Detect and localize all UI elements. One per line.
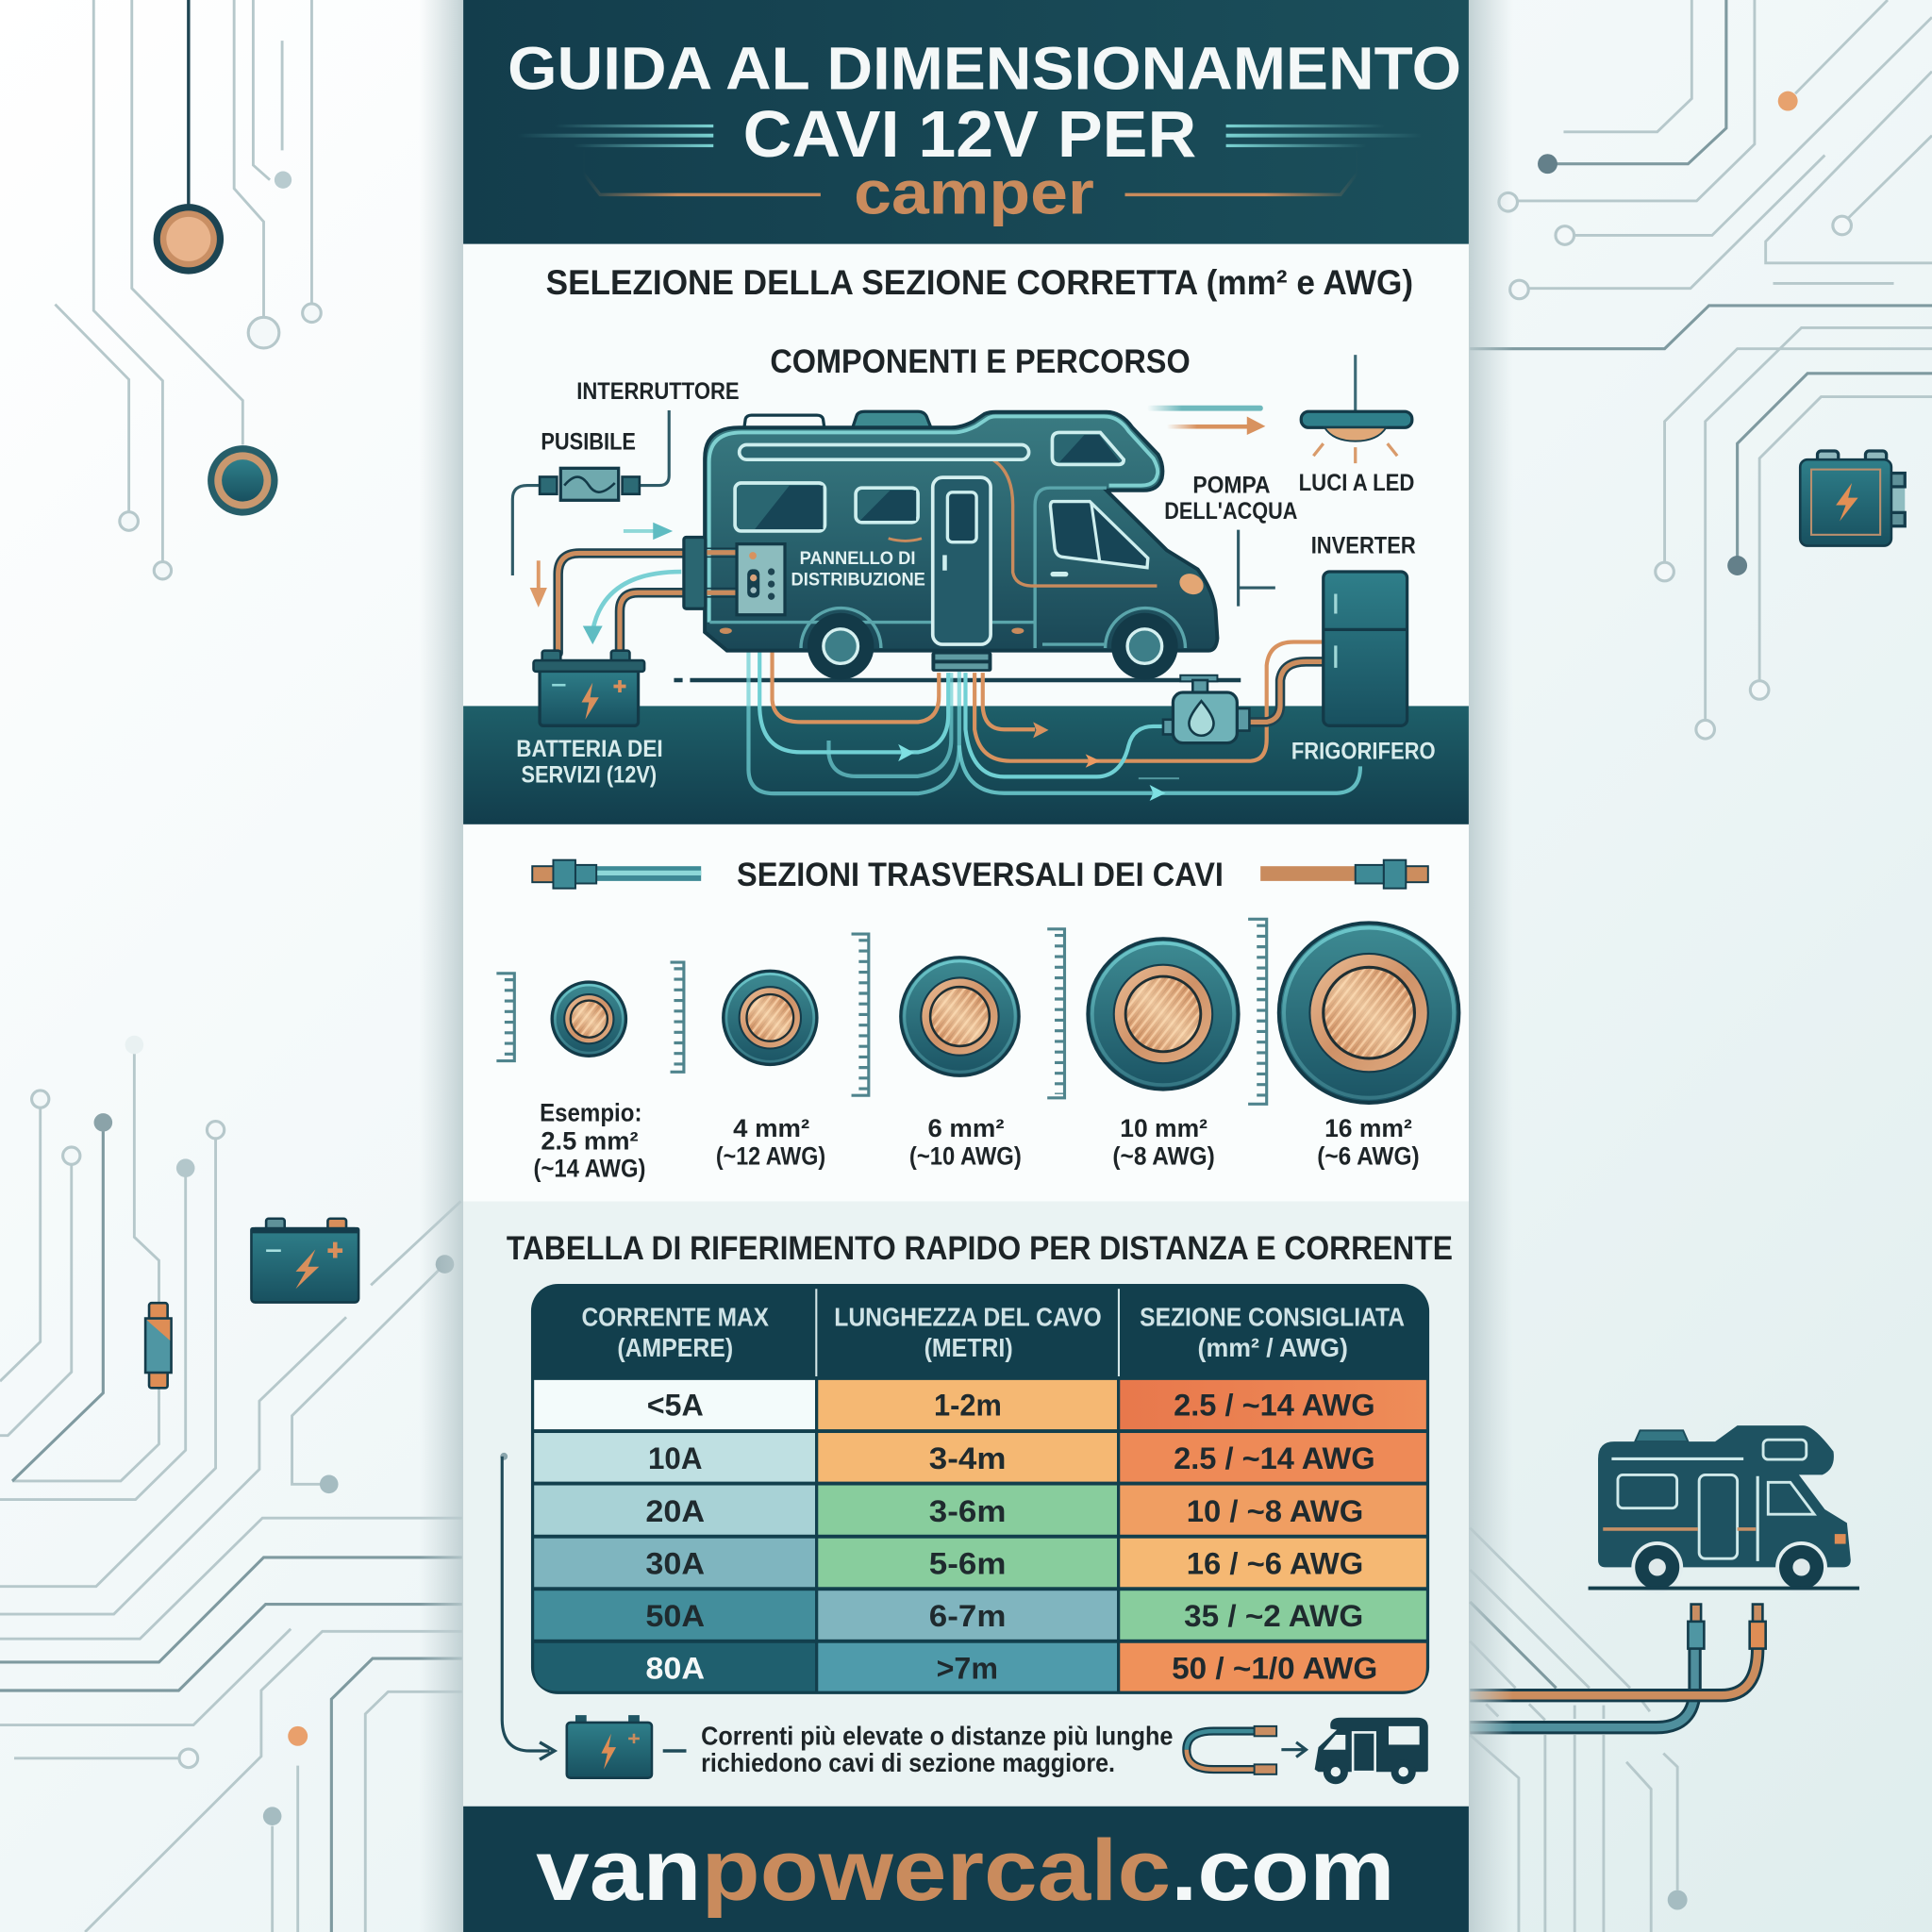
circuit traces: top right bbox=[1470, 0, 1932, 739]
row 80A: >7m bbox=[937, 1651, 998, 1686]
circuit traces: bottom right bbox=[1470, 1528, 1688, 1932]
label: inverter: INVERTER bbox=[1311, 533, 1416, 558]
label: water pump bbox=[1164, 473, 1297, 525]
icon: fuse bbox=[145, 1303, 172, 1388]
label: distribution panel bbox=[791, 548, 925, 590]
window middle bbox=[856, 488, 918, 523]
side connector block bbox=[684, 537, 706, 608]
row 80A: 80A bbox=[645, 1651, 705, 1686]
ground band bbox=[463, 706, 1469, 824]
website url: van powercalc .com bbox=[536, 1823, 1395, 1919]
distribution panel box bbox=[737, 544, 785, 615]
front wheel bbox=[1106, 608, 1185, 679]
underfloor connector bbox=[931, 652, 991, 672]
title ornaments bbox=[518, 125, 1422, 194]
table header bbox=[581, 1289, 1405, 1376]
table header: CORRENTE MAX bbox=[581, 1302, 770, 1331]
door bbox=[933, 477, 991, 644]
icon: battery left bbox=[250, 1219, 359, 1303]
row 30A bbox=[534, 1539, 1426, 1587]
battery cables bbox=[558, 548, 737, 653]
panel: reference table bbox=[500, 1230, 1453, 1784]
icon: fridge bbox=[1324, 572, 1407, 725]
orange line bbox=[811, 458, 1157, 586]
icon: water pump bbox=[1163, 675, 1249, 743]
title: camper bbox=[854, 158, 1094, 227]
row <5A: 1-2m bbox=[934, 1388, 1002, 1423]
icon: U cable bbox=[1187, 1726, 1276, 1774]
title: GUIDA AL DIMENSIONAMENTO bbox=[508, 35, 1461, 103]
row 30A: 30A bbox=[645, 1546, 705, 1581]
row 10A: 3-4m bbox=[929, 1441, 1006, 1475]
underfloor cables bbox=[748, 615, 1360, 801]
cable 4 mm2 bbox=[724, 971, 817, 1064]
row 20A bbox=[534, 1486, 1426, 1535]
note text: Correnti più elevate o distanze più lunghe bbox=[701, 1721, 1173, 1750]
footer bbox=[463, 1807, 1469, 1932]
panel shadows bbox=[419, 0, 1513, 1932]
panel: cable cross sections bbox=[496, 857, 1458, 1182]
table header: (METRI) bbox=[924, 1333, 1013, 1362]
road line bbox=[674, 678, 1241, 682]
rulers bbox=[496, 919, 1267, 1104]
table header: (AMPERE) bbox=[617, 1333, 733, 1362]
label: distribution panel: DISTRIBUZIONE bbox=[791, 569, 925, 590]
icon: battery top right bbox=[1800, 451, 1905, 546]
cable labels: (~6 AWG) bbox=[1317, 1141, 1420, 1170]
cable 10 mm2 bbox=[1088, 939, 1239, 1090]
section heading: table: TABELLA DI RIFERIMENTO RAPIDO PER DISTANZA E CORRENTE bbox=[507, 1230, 1453, 1267]
cable labels: 10 mm² bbox=[1120, 1114, 1208, 1142]
camper bbox=[705, 411, 1217, 679]
header bbox=[463, 0, 1469, 244]
row 20A: 20A bbox=[645, 1493, 705, 1528]
table header: LUNGHEZZA DEL CAVO bbox=[834, 1302, 1102, 1331]
note text: richiedono cavi di sezione maggiore. bbox=[701, 1748, 1115, 1777]
main panel bbox=[463, 244, 1469, 1807]
node: teal bbox=[208, 445, 278, 516]
cable 6 mm2 bbox=[901, 958, 1019, 1075]
icon: LED lamp bbox=[1301, 355, 1412, 463]
connector right bbox=[1260, 860, 1428, 889]
circuit traces: top left bbox=[55, 0, 321, 579]
row 50A: 50A bbox=[645, 1598, 705, 1633]
camper rim highlight bbox=[709, 416, 1158, 623]
row 80A: 50 / ~1/0 AWG bbox=[1172, 1651, 1377, 1686]
pump leader bbox=[1239, 530, 1275, 607]
cable labels: (~12 AWG) bbox=[716, 1141, 825, 1170]
note text bbox=[701, 1721, 1173, 1777]
label: battery: BATTERIA DEI bbox=[516, 737, 663, 762]
cable labels: (~10 AWG) bbox=[909, 1141, 1022, 1170]
circuit traces: bottom left bbox=[0, 1036, 462, 1932]
label: battery: SERVIZI (12V) bbox=[521, 762, 657, 788]
pump to fridge cables bbox=[1247, 661, 1324, 722]
table bbox=[531, 1284, 1429, 1694]
row <5A: 2.5 / ~14 AWG bbox=[1174, 1388, 1375, 1423]
label: water pump: POMPA bbox=[1192, 473, 1271, 498]
cab window bbox=[1050, 502, 1148, 568]
row 50A: 6-7m bbox=[929, 1598, 1006, 1633]
row 10A bbox=[534, 1433, 1426, 1482]
row 10A: 10A bbox=[648, 1441, 702, 1475]
arrows near battery bbox=[530, 523, 681, 644]
section heading: selection: SELEZIONE DELLA SEZIONE CORRETTA (mm² e AWG) bbox=[546, 262, 1413, 302]
arrow to camper bbox=[1281, 1742, 1306, 1757]
cables right bbox=[1470, 1605, 1766, 1727]
dash bbox=[663, 1750, 687, 1752]
cable labels: 6 mm² bbox=[928, 1114, 1005, 1142]
cable labels: 16 mm² bbox=[1324, 1114, 1412, 1142]
cable 16 mm2 bbox=[1279, 923, 1458, 1103]
label: battery bbox=[516, 737, 663, 788]
arrows to lamp bbox=[1147, 406, 1265, 435]
battery bbox=[534, 651, 644, 725]
node: copper bbox=[154, 204, 224, 275]
label: switch: INTERRUTTORE bbox=[576, 379, 740, 405]
table header: SEZIONE CONSIGLIATA bbox=[1140, 1302, 1405, 1331]
icon: camper note bbox=[1315, 1718, 1428, 1784]
icon: small camper right bbox=[1589, 1425, 1859, 1593]
panel: components diagram bbox=[463, 343, 1469, 824]
cable labels bbox=[534, 1099, 1420, 1182]
cable labels: (~14 AWG) bbox=[534, 1154, 645, 1182]
row 50A bbox=[534, 1591, 1426, 1640]
cable labels: 2.5 mm² bbox=[541, 1127, 639, 1156]
fuse with wires bbox=[512, 410, 669, 575]
icon: battery note bbox=[567, 1715, 652, 1778]
row 10A: 2.5 / ~14 AWG bbox=[1174, 1441, 1375, 1475]
cable labels: Esempio: bbox=[540, 1099, 641, 1127]
connector left bbox=[532, 860, 701, 889]
table header: (mm² / AWG) bbox=[1198, 1333, 1348, 1362]
cable labels: (~8 AWG) bbox=[1112, 1141, 1215, 1170]
row 20A: 10 / ~8 AWG bbox=[1187, 1493, 1363, 1528]
row <5A bbox=[534, 1380, 1426, 1429]
window left bbox=[735, 483, 824, 531]
row 20A: 3-6m bbox=[929, 1493, 1006, 1528]
title: CAVI 12V PER bbox=[743, 97, 1196, 171]
section heading: cross sections: SEZIONI TRASVERSALI DEI CAVI bbox=[737, 857, 1224, 893]
heading: components: COMPONENTI E PERCORSO bbox=[770, 343, 1191, 380]
row 80A bbox=[534, 1643, 1426, 1691]
row <5A: <5A bbox=[647, 1388, 704, 1423]
row 30A: 16 / ~6 AWG bbox=[1187, 1546, 1363, 1581]
label: fridge: FRIGORIFERO bbox=[1291, 740, 1436, 765]
row 30A: 5-6m bbox=[929, 1546, 1006, 1581]
window overcab bbox=[1052, 432, 1124, 464]
label: fuse: PUSIBILE bbox=[541, 430, 636, 456]
cable labels: 4 mm² bbox=[733, 1114, 809, 1142]
label: LED lights: LUCI A LED bbox=[1299, 471, 1414, 496]
rear wheel bbox=[801, 608, 881, 679]
cab frame and belt lines bbox=[709, 488, 1107, 648]
note arrow bbox=[500, 1453, 555, 1759]
label: water pump: DELL'ACQUA bbox=[1164, 499, 1297, 525]
title bbox=[508, 35, 1461, 227]
row 50A: 35 / ~2 AWG bbox=[1184, 1598, 1363, 1633]
label: distribution panel: PANNELLO DI bbox=[800, 548, 915, 569]
cable 2.5 mm2 bbox=[552, 982, 626, 1056]
